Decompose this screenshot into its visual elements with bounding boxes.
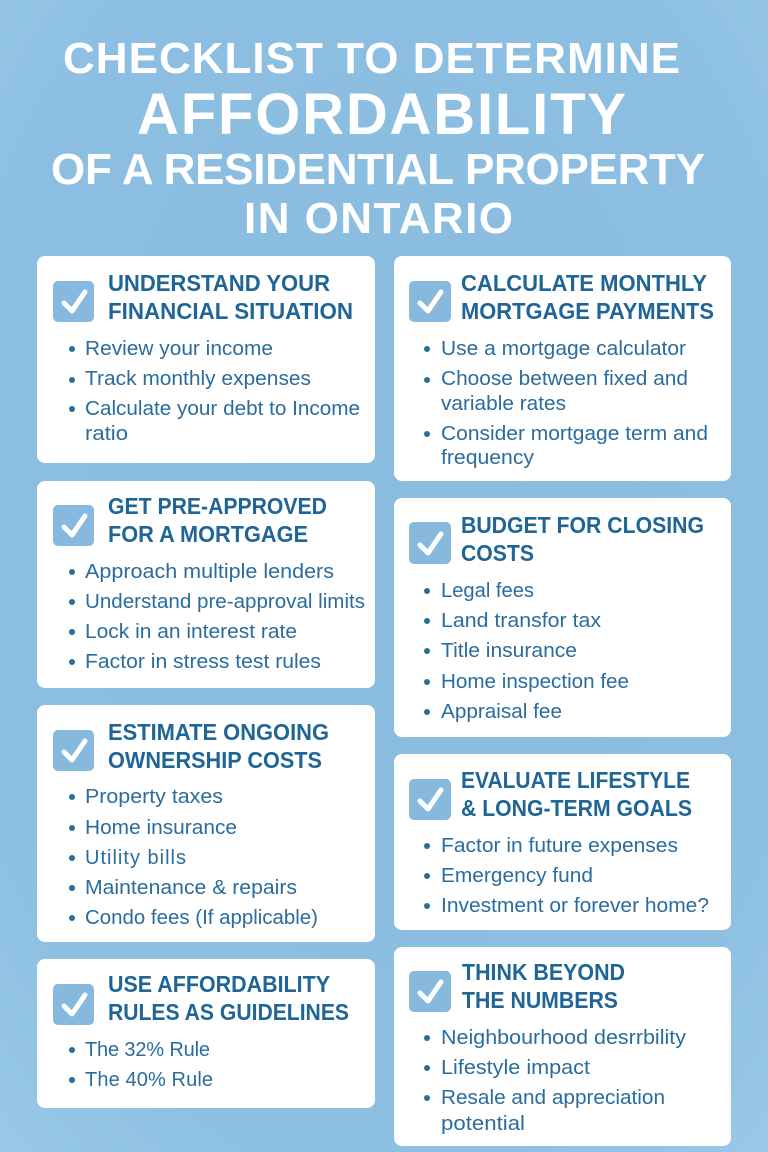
heading: [108, 971, 349, 1025]
icon: checkbox: [409, 522, 451, 564]
bullet list: Investment or forever home?: [441, 895, 709, 917]
panel: get pre-approved for a mortgage: [37, 481, 375, 688]
heading: & LONG-TERM GOALS: [461, 795, 692, 821]
icon: checkbox: [409, 971, 451, 1012]
heading: FOR A MORTGAGE: [108, 521, 308, 547]
bullet list: Neighbourhood desrrbility: [441, 1027, 686, 1049]
bullet list: Approach multiple lenders: [85, 561, 334, 583]
heading: THINK BEYOND: [462, 959, 625, 985]
heading: COSTS: [461, 540, 534, 566]
bullet list: potential: [441, 1113, 525, 1135]
icon: checkbox: [53, 505, 94, 546]
bullet list: Resale and appreciation: [441, 1087, 665, 1109]
bullet list: Lifestyle impact: [441, 1057, 590, 1079]
bullet list: Use a mortgage calculator: [441, 338, 686, 360]
bullet list: Condo fees (If applicable): [85, 907, 318, 929]
heading: FINANCIAL SITUATION: [108, 298, 353, 324]
heading: THE NUMBERS: [462, 987, 618, 1013]
heading: [108, 270, 353, 324]
bullet list: [69, 786, 318, 929]
icon: checkbox: [409, 281, 451, 322]
bullet list: Maintenance & repairs: [85, 877, 297, 899]
bullet list: [424, 835, 709, 917]
heading: BUDGET FOR CLOSING: [461, 512, 704, 538]
bullet list: Choose between fixed and: [441, 368, 688, 390]
heading: ESTIMATE ONGOING: [108, 719, 329, 745]
bullet list: [69, 338, 360, 445]
bullet list: The 40% Rule: [85, 1069, 213, 1091]
bullet list: Utility bills: [85, 847, 186, 869]
title: [51, 34, 705, 243]
bullet list: Home inspection fee: [441, 671, 629, 693]
bullet list: Factor in future expenses: [441, 835, 678, 857]
title: OF A RESIDENTIAL PROPERTY: [51, 145, 705, 194]
panel: estimate ongoing ownership costs: [37, 705, 375, 942]
bullet list: frequency: [441, 447, 534, 469]
bullet list: Consider mortgage term and: [441, 423, 708, 445]
panel: use affordability rules as guidelines: [37, 959, 375, 1108]
heading: [108, 719, 329, 773]
title: IN ONTARIO: [244, 194, 513, 243]
icon: checkbox: [53, 281, 94, 322]
heading: CALCULATE MONTHLY: [461, 270, 707, 296]
heading: UNDERSTAND YOUR: [108, 270, 330, 296]
panel: budget for closing costs: [394, 498, 731, 737]
heading: RULES AS GUIDELINES: [108, 999, 349, 1025]
heading: OWNERSHIP COSTS: [108, 747, 322, 773]
bullet list: [69, 1039, 213, 1091]
bullet list: Calculate your debt to Income: [85, 398, 360, 420]
heading: [461, 767, 692, 821]
bullet list: Emergency fund: [441, 865, 593, 887]
heading: [461, 270, 714, 324]
panel: calculate monthly mortgage payments: [394, 256, 731, 481]
panel: think beyond the numbers: [394, 947, 731, 1146]
panel: understand your financial situation: [37, 256, 375, 463]
heading: [461, 512, 704, 566]
bullet list: ratio: [85, 423, 128, 445]
heading: [108, 493, 327, 547]
heading: GET PRE-APPROVED: [108, 493, 327, 519]
heading: [462, 959, 625, 1013]
bullet list: [424, 580, 629, 723]
bullet list: Factor in stress test rules: [85, 651, 321, 673]
bullet list: Review your income: [85, 338, 273, 360]
bullet list: The 32% Rule: [85, 1039, 210, 1061]
bullet list: Title insurance: [441, 640, 577, 662]
bullet list: Property taxes: [85, 786, 223, 808]
bullet list: Land transfor tax: [441, 610, 601, 632]
bullet list: Appraisal fee: [441, 701, 562, 723]
bullet list: Lock in an interest rate: [85, 621, 297, 643]
bullet list: Track monthly expenses: [85, 368, 311, 390]
heading: EVALUATE LIFESTYLE: [461, 767, 690, 793]
bullet list: [424, 338, 708, 469]
icon: checkbox: [409, 779, 451, 820]
bullet list: Understand pre-approval limits: [85, 591, 365, 613]
bullet list: variable rates: [441, 393, 566, 415]
title: CHECKLIST TO DETERMINE: [63, 34, 680, 83]
heading: USE AFFORDABILITY: [108, 971, 330, 997]
bullet list: [69, 561, 365, 673]
panel: evaluate lifestyle and long-term goals: [394, 754, 731, 930]
icon: checkbox: [53, 984, 94, 1025]
title: AFFORDABILITY: [137, 82, 626, 147]
icon: checkbox: [53, 730, 94, 771]
bullet list: [424, 1027, 686, 1135]
bullet list: Legal fees: [441, 580, 534, 602]
heading: MORTGAGE PAYMENTS: [461, 298, 714, 324]
bullet list: Home insurance: [85, 817, 237, 839]
